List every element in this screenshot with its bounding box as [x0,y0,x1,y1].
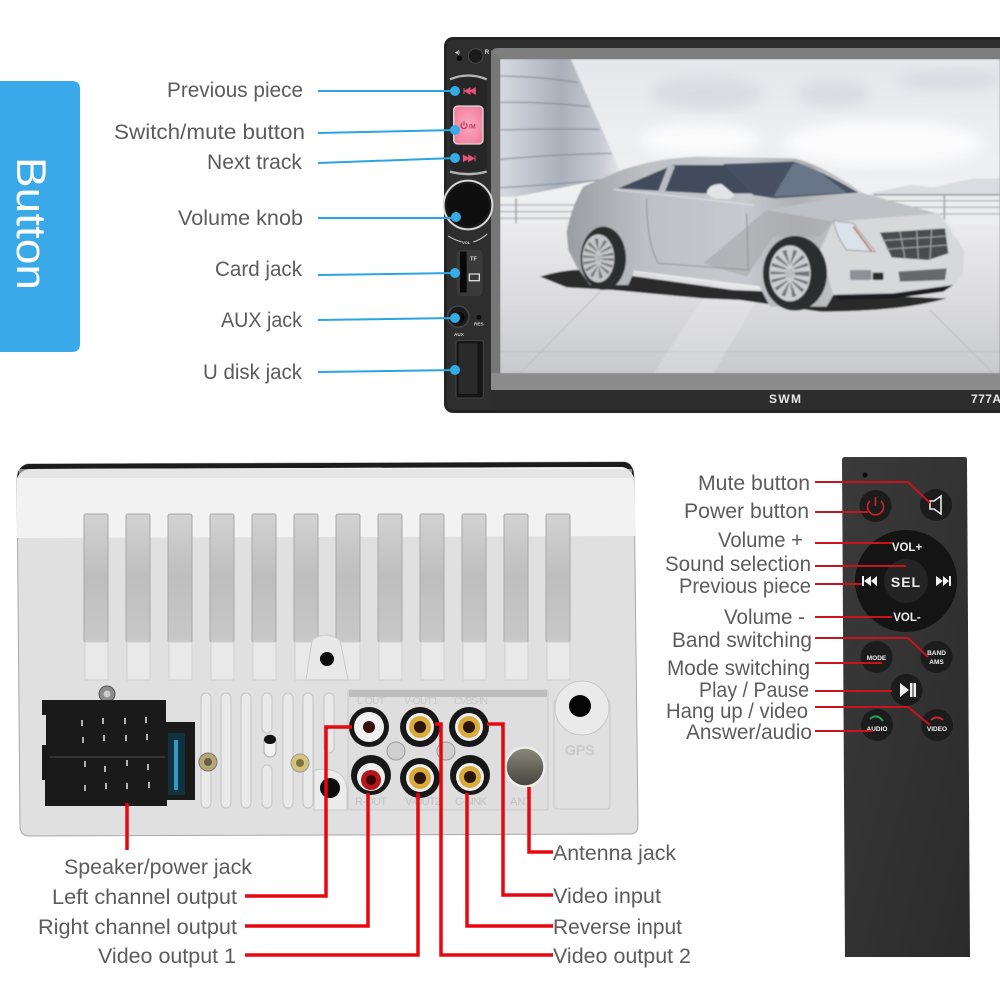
GPS port [554,681,610,809]
windows [618,165,753,193]
wiring connector [42,700,195,806]
mode and band buttons: BAND [927,650,946,657]
labels: remote: Previous piece [679,575,811,598]
labels: remote: Mode switching [667,657,810,680]
mute button [920,489,952,521]
RCA panel: V-OUT1 [404,696,438,707]
RCA panel [348,690,548,810]
building cone [500,59,621,197]
brand strip: SWM [769,392,801,406]
labels: remote: Play / Pause [699,679,809,702]
labels: rear connectors: Video output 2 [553,945,691,968]
heading: Button: Button [8,157,55,290]
RCA panel: R-OUT [355,796,387,808]
heat sink slots [84,514,570,680]
power button [860,490,892,522]
left control strip: AUX [454,332,465,337]
labels: rear connectors: Right channel output [38,916,237,939]
mode and band buttons: MODE [867,655,887,662]
left control strip: RES [474,322,484,327]
call buttons [861,709,953,741]
RCA panel: L-OUT [357,696,385,707]
labels: remote: Mute button [698,472,810,495]
left control strip [444,49,492,398]
callouts: blue leader lines and labels [114,79,461,384]
labels: remote: Band switching [672,629,812,652]
left control strip: VOL [462,240,471,245]
call buttons: AUDIO [867,726,887,733]
left control strip: TF [470,257,477,263]
direction ring: VOL+ [892,542,922,554]
antenna jack [506,748,544,786]
labels: rear connectors [38,842,691,968]
screws [99,686,309,772]
labels: rear connectors: Left channel output [52,886,237,909]
wheels [581,227,827,311]
volume knob [444,181,492,229]
callouts: blue leader lines and labels: U disk jack [203,361,302,384]
RCA panel: C-SINK [455,796,488,808]
labels: remote: Volume - [724,606,805,629]
headlight [833,221,875,252]
card slot [457,250,483,296]
bezel corner [491,50,500,373]
labels: remote: Power button [684,500,809,523]
car body [567,157,964,307]
mount hole [306,635,348,680]
RCA panel: CVBS-IN [454,696,488,707]
labels: rear connectors: Antenna jack [553,842,677,865]
ground [500,223,1000,373]
labels: remote: Sound selection [665,553,811,576]
callouts: blue leader lines and labels: Volume knob [178,207,303,230]
RCA jacks [349,707,490,798]
tab: Button [0,81,80,352]
left control strip: ◂) [454,50,460,56]
play button [890,674,922,706]
callouts: blue leader lines and labels: Card jack [215,258,302,281]
GPS port: GPS [565,742,595,758]
brand strip [492,391,1000,410]
labels: remote: Answer/audio [686,721,812,744]
labels: rear connectors: Video input [553,885,661,908]
direction ring: SEL [891,574,921,590]
RCA panel: V-OUT2 [405,796,441,808]
callouts: blue leader lines and labels: Switch/mute button [114,121,305,144]
left control strip: R [485,49,490,56]
callouts: remote leader lines [815,482,930,731]
labels: rear connectors: Speaker/power jack [64,856,252,879]
usb port [456,341,483,398]
black round port [314,769,347,810]
RCA panel: ANT [510,796,532,808]
labels: rear connectors: Reverse input [553,916,682,939]
mode and band buttons: AMS [929,659,944,666]
panel: head unit front [444,37,1000,413]
call buttons: VIDEO [927,726,947,733]
screen photo with car [500,59,1000,373]
mode and band buttons [860,641,952,673]
lower vents [201,693,334,808]
direction ring [855,530,957,632]
callouts: blue leader lines and labels: AUX jack [221,309,302,332]
mirror [707,184,735,199]
aux jack [448,306,469,327]
labels: rear connectors: Video output 1 [98,945,236,968]
labels: remote: Volume + [718,529,803,552]
callouts: blue leader lines and labels: Next track [207,151,302,174]
callouts: red leader lines [127,724,553,955]
direction ring: VOL- [893,612,921,624]
panel: remote control [842,457,970,957]
labels: remote: Hang up / video [666,700,808,723]
screen bezel [491,48,1000,390]
left control strip: /M [469,123,476,130]
callouts: blue leader lines and labels: Previous piece [167,79,303,102]
pink switch [454,106,483,144]
adjust slot [264,735,276,757]
labels: remote [665,472,812,744]
panel: rear of unit [17,462,638,836]
grille [880,228,948,260]
door lines [647,198,750,270]
car shadow [540,270,947,312]
